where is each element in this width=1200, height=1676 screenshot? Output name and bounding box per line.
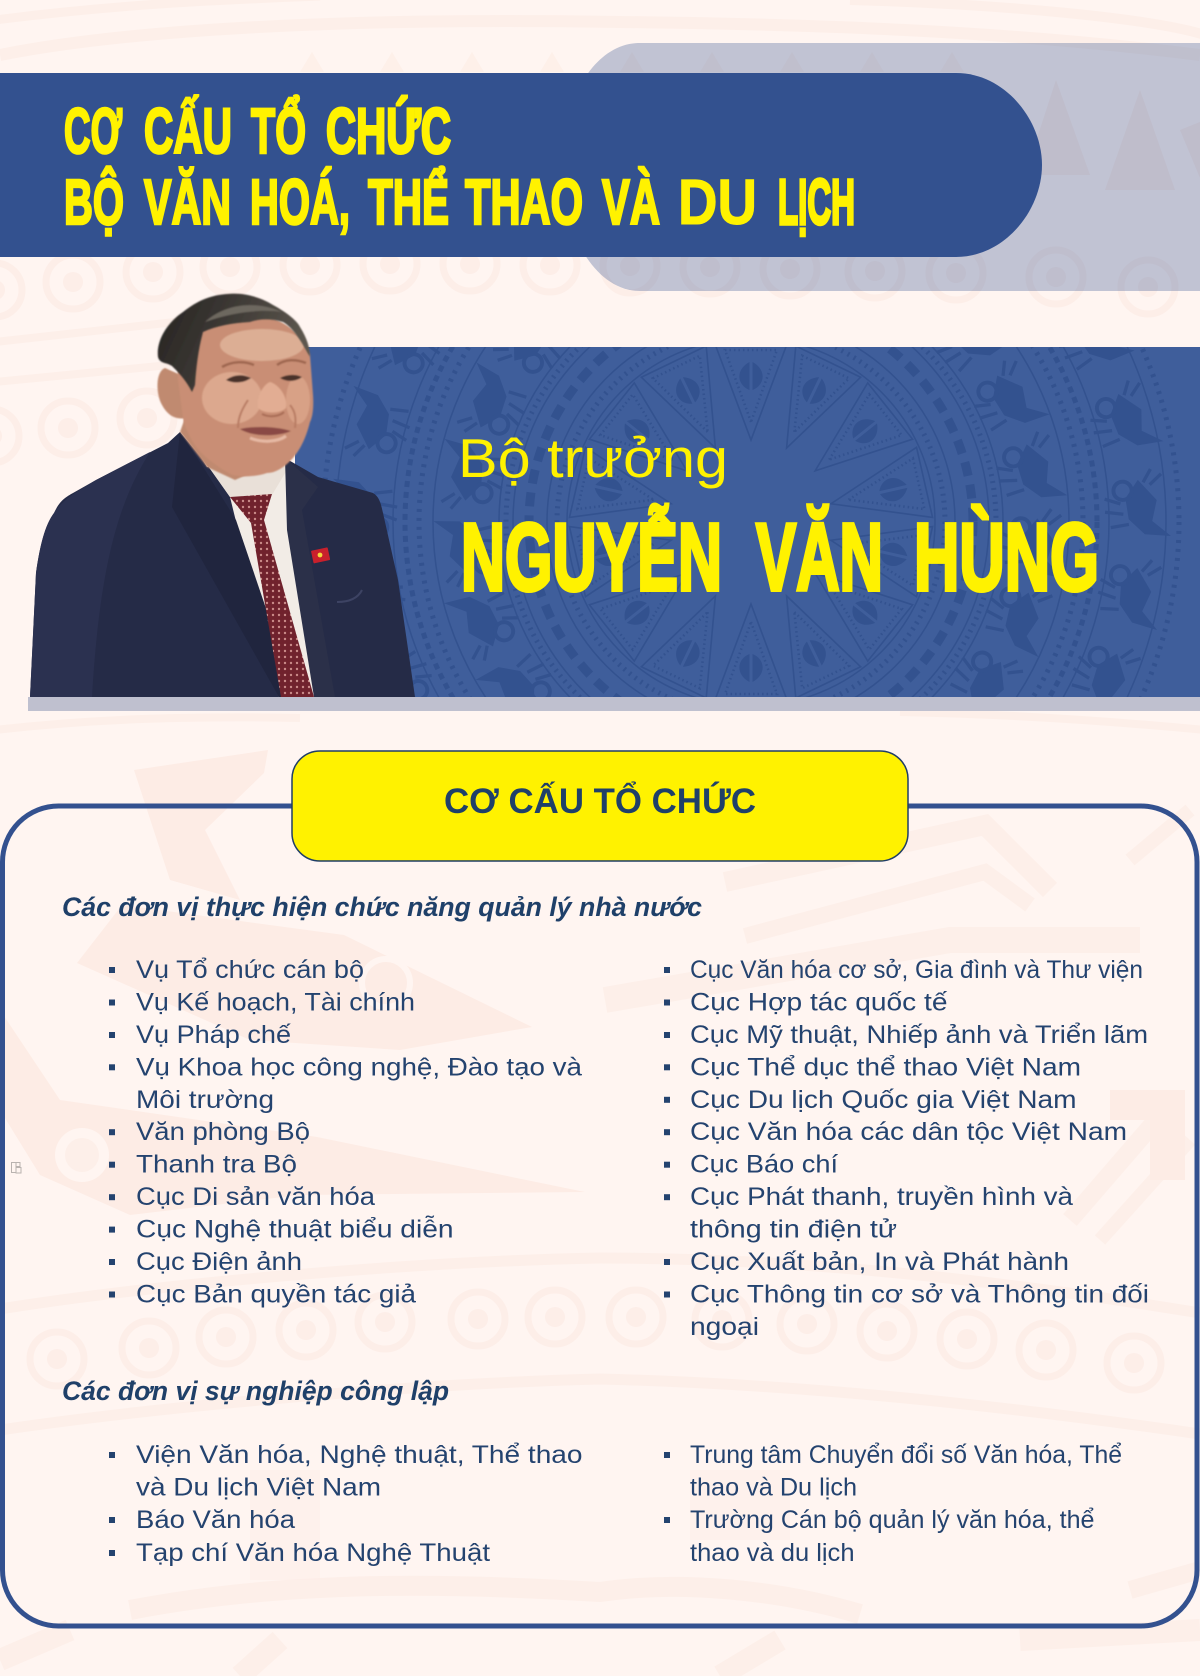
title banner (0, 73, 1042, 257)
minister name (461, 503, 1099, 611)
list: public service units, right column: thao và Du lịch (690, 1474, 857, 1502)
title line 2: BỘ (64, 165, 124, 238)
list: state management units, left column: Vụ Pháp chế (136, 1021, 291, 1049)
list: public service units, left column (109, 1441, 582, 1567)
mouth (240, 427, 291, 435)
heading: public service units: Các đơn vị sự nghiệp công lập (62, 1376, 449, 1406)
bronze drum pattern (323, 347, 1182, 697)
title line 1 (64, 94, 451, 167)
list: state management units, right column (664, 956, 1149, 1341)
title line 1: CƠ (64, 95, 122, 167)
list: state management units, left column: Môi trường (136, 1086, 274, 1114)
list: state management units, left column: Vụ Tổ chức cán bộ (136, 956, 364, 984)
title line 2: DU (678, 166, 757, 238)
list: state management units, right column: Cục Báo chí (690, 1151, 838, 1179)
list: state management units, right column: Cục Văn hóa các dân tộc Việt Nam (690, 1118, 1127, 1146)
title line 2: VĂN (144, 166, 231, 238)
title line 2: VÀ (602, 166, 660, 238)
list: public service units, left column: và Du lịch Việt Nam (136, 1474, 381, 1502)
list: state management units, right column: Cục Xuất bản, In và Phát hành (690, 1248, 1069, 1276)
suit (30, 432, 415, 697)
title line 2: HOÁ, (250, 166, 350, 238)
list: state management units, left column: Vụ Khoa học công nghệ, Đào tạo và (136, 1053, 582, 1081)
minister panel (28, 347, 1200, 711)
list: public service units, left column: Viện Văn hóa, Nghệ thuật, Thể thao (136, 1441, 582, 1469)
list: state management units, right column: thông tin điện tử (690, 1216, 897, 1244)
tie (230, 494, 314, 697)
list: state management units, right column: Cục Du lịch Quốc gia Việt Nam (690, 1086, 1076, 1114)
nose (258, 382, 286, 412)
badge label: CƠ CẤU TỔ CHỨC (444, 781, 756, 821)
list: state management units, right column: ngoại (690, 1313, 759, 1341)
list: state management units, right column: Cục Hợp tác quốc tế (690, 988, 948, 1016)
title line 1: CẤU (144, 95, 232, 167)
eyes (226, 375, 302, 382)
hair (158, 294, 310, 392)
list: public service units, left column: Báo Văn hóa (136, 1506, 295, 1534)
minister name: HÙNG (914, 504, 1099, 611)
title line 1: TỔ (251, 94, 306, 167)
title line 2: LỊCH (778, 166, 855, 238)
pocket line (337, 590, 362, 602)
minister name: NGUYỄN (461, 503, 722, 611)
face (178, 313, 313, 476)
list: public service units, right column: Trung tâm Chuyển đổi số Văn hóa, Thể (690, 1441, 1122, 1469)
title line 2 (64, 165, 855, 238)
title line 1: CHỨC (326, 95, 451, 167)
minister role label: Bộ trưởng (458, 427, 728, 489)
list: state management units, right column: Cục Phát thanh, truyền hình và (690, 1183, 1073, 1211)
title backing pill (560, 43, 1200, 291)
list: state management units, left column: Thanh tra Bộ (136, 1151, 297, 1179)
list: state management units, left column (109, 956, 582, 1308)
title line 2: THỂ (368, 165, 449, 238)
list: state management units, right column: Cục Thông tin cơ sở và Thông tin đối (690, 1280, 1149, 1308)
heading: state management units: Các đơn vị thực hiện chức năng quản lý nhà nước (62, 892, 702, 922)
neck and ear (157, 368, 292, 480)
list: state management units, left column: Vụ Kế hoạch, Tài chính (136, 988, 415, 1016)
list: state management units, right column: Cục Mỹ thuật, Nhiếp ảnh và Triển lãm (690, 1021, 1148, 1049)
organisation frame (2, 806, 1197, 1626)
minister portrait (30, 294, 415, 697)
list: state management units, right column: Cục Thể dục thể thao Việt Nam (690, 1053, 1081, 1081)
right lapel (285, 458, 335, 697)
panel background (295, 347, 1200, 697)
list: public service units, left column: Tạp chí Văn hóa Nghệ Thuật (136, 1539, 490, 1567)
list: state management units, left column: Cục Điện ảnh (136, 1248, 302, 1276)
section badge (292, 751, 908, 861)
list: state management units, left column: Cục Bản quyền tác giả (136, 1280, 416, 1308)
left lapel (172, 432, 296, 697)
small mark (12, 1162, 21, 1173)
panel shadow strip (28, 697, 1200, 711)
list: public service units, right column: Trường Cán bộ quản lý văn hóa, thể (690, 1506, 1094, 1534)
list: state management units, left column: Cục Di sản văn hóa (136, 1183, 375, 1211)
list: public service units, right column: thao và du lịch (690, 1539, 854, 1567)
lapel pin (311, 547, 330, 564)
shirt (190, 440, 318, 697)
list: state management units, right column: Cục Văn hóa cơ sở, Gia đình và Thư viện (690, 956, 1143, 984)
list: state management units, left column: Văn phòng Bộ (136, 1118, 310, 1146)
list: public service units, right column (664, 1441, 1122, 1567)
minister name: VĂN (756, 504, 883, 611)
list: state management units, left column: Cục Nghệ thuật biểu diễn (136, 1215, 454, 1244)
title line 2: THAO (465, 166, 583, 238)
